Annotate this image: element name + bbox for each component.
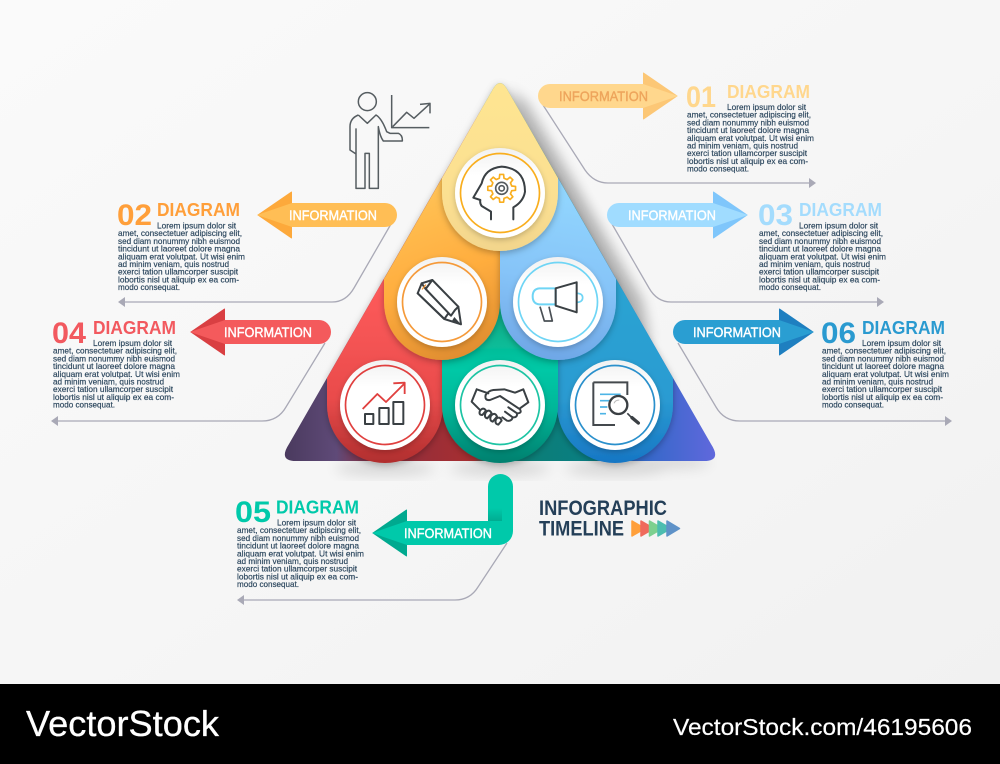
segment: green bbox=[442, 250, 558, 463]
text block 01: ad minim veniam, quis nostrud bbox=[687, 140, 798, 150]
text block 01: exerci tation ullamcorper suscipit bbox=[687, 148, 808, 158]
text block 01: Lorem ipsum dolor sit bbox=[727, 102, 807, 112]
connector line 03 bbox=[612, 224, 884, 307]
text block 04 bbox=[52, 317, 180, 410]
text block 02: DIAGRAM bbox=[157, 199, 240, 220]
segment: yellow bbox=[442, 83, 558, 251]
text block 03: aliquam erat volutpat. Ut wisi enim bbox=[759, 251, 886, 261]
text block 03: lobortis nisl ut aliquip ex ea com- bbox=[759, 274, 880, 284]
text block 04: aliquam erat volutpat. Ut wisi enim bbox=[53, 369, 180, 379]
text block 06: aliquam erat volutpat. Ut wisi enim bbox=[822, 369, 949, 379]
text block 03 bbox=[758, 199, 886, 292]
text block 01: DIAGRAM bbox=[727, 81, 810, 102]
arrow 06 bbox=[673, 309, 814, 355]
icon: document search bbox=[570, 360, 660, 450]
text block 03: 03 bbox=[758, 199, 793, 232]
icon: megaphone bbox=[513, 257, 603, 347]
icon: head with gear bbox=[455, 148, 545, 238]
icon: growth chart bbox=[340, 360, 430, 450]
segment: red bbox=[327, 277, 443, 463]
text block 03: exerci tation ullamcorper suscipit bbox=[759, 267, 880, 277]
segment: orange bbox=[384, 178, 500, 360]
text block 05: aliquam erat volutpat. Ut wisi enim bbox=[237, 548, 364, 558]
text block 03: Lorem ipsum dolor sit bbox=[799, 220, 879, 230]
text block 05: DIAGRAM bbox=[276, 496, 359, 518]
text block 02: amet, consectetuer adipiscing elit, bbox=[118, 228, 242, 238]
pyramid diagram bbox=[285, 83, 715, 463]
footer image id: VectorStock.com/46195606 bbox=[673, 714, 972, 740]
arrow 05 bbox=[372, 474, 513, 556]
text block 02: 02 bbox=[117, 199, 152, 232]
text block 01: tincidunt ut laoreet dolore magna bbox=[687, 125, 809, 135]
title: INFOGRAPHIC bbox=[539, 496, 667, 520]
text block 04: modo consequat. bbox=[53, 400, 115, 410]
footer band bbox=[0, 684, 1000, 764]
text block 06 bbox=[821, 317, 949, 410]
text block 06: amet, consectetuer adipiscing elit, bbox=[822, 346, 946, 356]
text block 02: aliquam erat volutpat. Ut wisi enim bbox=[118, 251, 245, 261]
text block 02 bbox=[117, 199, 245, 292]
connector line 05 bbox=[237, 543, 507, 605]
text block 01: aliquam erat volutpat. Ut wisi enim bbox=[687, 133, 814, 143]
text block 01 bbox=[686, 81, 814, 174]
text block 05: lobortis nisl ut aliquip ex ea com- bbox=[237, 571, 358, 581]
text block 02: Lorem ipsum dolor sit bbox=[157, 220, 237, 230]
arrow 02: INFORMATION bbox=[289, 207, 377, 223]
text block 04: tincidunt ut laoreet dolore magna bbox=[53, 361, 175, 371]
text block 02: ad minim veniam, quis nostrud bbox=[118, 259, 229, 269]
text block 04: lobortis nisl ut aliquip ex ea com- bbox=[53, 392, 174, 402]
text block 01: lobortis nisl ut aliquip ex ea com- bbox=[687, 156, 808, 166]
title bbox=[539, 496, 667, 540]
text block 06: sed diam nonummy nibh euismod bbox=[822, 353, 944, 363]
text block 06: exerci tation ullamcorper suscipit bbox=[822, 384, 943, 394]
text block 01: 01 bbox=[686, 81, 716, 114]
icon: handshake bbox=[455, 360, 545, 450]
text block 04: Lorem ipsum dolor sit bbox=[93, 338, 173, 348]
connector line 04 bbox=[51, 343, 325, 426]
text block 05: ad minim veniam, quis nostrud bbox=[237, 556, 348, 566]
text block 06: DIAGRAM bbox=[862, 317, 945, 338]
text block 03: ad minim veniam, quis nostrud bbox=[759, 259, 870, 269]
text block 02: lobortis nisl ut aliquip ex ea com- bbox=[118, 274, 239, 284]
text block 03: amet, consectetuer adipiscing elit, bbox=[759, 228, 883, 238]
text block 01: amet, consectetuer adipiscing elit, bbox=[687, 110, 811, 120]
text block 02: modo consequat. bbox=[118, 282, 180, 292]
text block 04: DIAGRAM bbox=[93, 317, 176, 338]
text block 02: tincidunt ut laoreet dolore magna bbox=[118, 244, 240, 254]
icon: title chevrons bbox=[632, 521, 680, 536]
text block 05: modo consequat. bbox=[237, 579, 299, 589]
text block 05: exerci tation ullamcorper suscipit bbox=[237, 564, 358, 574]
text block 04: sed diam nonummy nibh euismod bbox=[53, 353, 175, 363]
footer logo: VectorStock bbox=[26, 703, 220, 744]
title: TIMELINE bbox=[539, 516, 624, 540]
segment: light blue bbox=[500, 178, 616, 360]
arrow 04: INFORMATION bbox=[224, 324, 312, 340]
text block 02: sed diam nonummy nibh euismod bbox=[118, 236, 240, 246]
text block 05: sed diam nonummy nibh euismod bbox=[237, 533, 359, 543]
text block 03: DIAGRAM bbox=[799, 199, 882, 220]
arrow 03: INFORMATION bbox=[628, 207, 716, 223]
arrow 01 bbox=[538, 73, 678, 119]
text block 06: Lorem ipsum dolor sit bbox=[862, 338, 942, 348]
text block 03: modo consequat. bbox=[759, 282, 821, 292]
segment: blue bbox=[557, 277, 673, 463]
pyramid shadow bbox=[335, 89, 710, 475]
text block 05: amet, consectetuer adipiscing elit, bbox=[237, 525, 361, 535]
text block 05: 05 bbox=[235, 496, 271, 529]
text block 06: ad minim veniam, quis nostrud bbox=[822, 376, 933, 386]
text block 01: sed diam nonummy nibh euismod bbox=[687, 117, 809, 127]
text block 05: Lorem ipsum dolor sit bbox=[277, 518, 357, 528]
text block 03: sed diam nonummy nibh euismod bbox=[759, 236, 881, 246]
icon: pencil bbox=[397, 257, 487, 347]
text block 01: modo consequat. bbox=[687, 164, 749, 174]
arrow 04 bbox=[190, 309, 331, 355]
text block 06: lobortis nisl ut aliquip ex ea com- bbox=[822, 392, 943, 402]
text block 04: amet, consectetuer adipiscing elit, bbox=[53, 346, 177, 356]
text block 06: modo consequat. bbox=[822, 400, 884, 410]
text block 06: tincidunt ut laoreet dolore magna bbox=[822, 361, 944, 371]
connector line 02 bbox=[118, 224, 391, 307]
text block 04: ad minim veniam, quis nostrud bbox=[53, 376, 164, 386]
text block 03: tincidunt ut laoreet dolore magna bbox=[759, 244, 881, 254]
text block 04: exerci tation ullamcorper suscipit bbox=[53, 384, 174, 394]
connector line 01 bbox=[543, 105, 816, 188]
arrow 05: INFORMATION bbox=[404, 525, 492, 541]
arrow 01: INFORMATION bbox=[559, 88, 648, 104]
text block 04: 04 bbox=[52, 317, 86, 350]
text block 05 bbox=[235, 496, 364, 589]
text block 05: tincidunt ut laoreet dolore magna bbox=[237, 541, 359, 551]
text block 06: 06 bbox=[821, 317, 856, 350]
triangle base bbox=[285, 83, 715, 461]
text block 02: exerci tation ullamcorper suscipit bbox=[118, 267, 239, 277]
arrow 02 bbox=[257, 192, 397, 238]
arrow 06: INFORMATION bbox=[693, 324, 781, 340]
icon: presenter with chart bbox=[350, 93, 430, 188]
arrow 03 bbox=[607, 192, 748, 238]
connector line 06 bbox=[678, 343, 952, 426]
